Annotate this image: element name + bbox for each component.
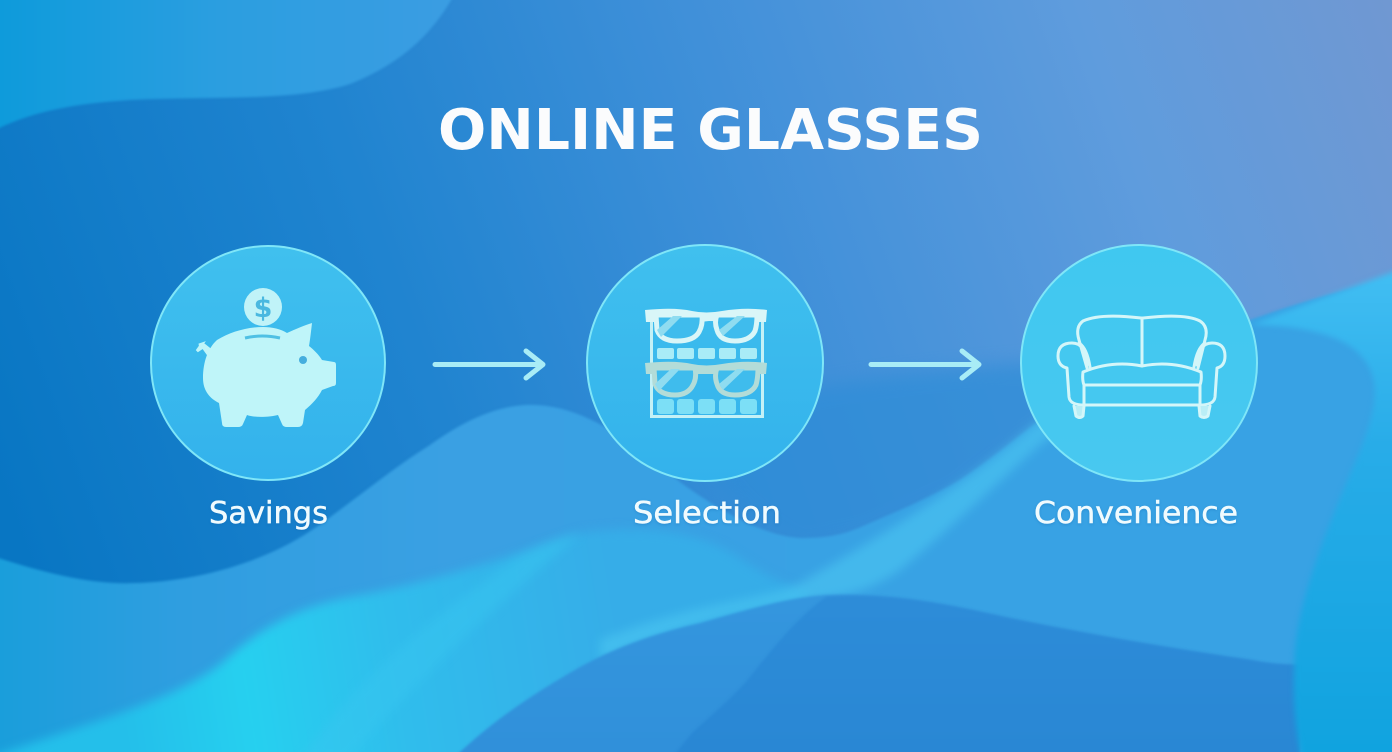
icon: dollar coin: $	[254, 293, 272, 324]
icon: lower glasses	[645, 362, 767, 395]
icon: upper glasses	[645, 309, 767, 341]
icon: dollar coin	[244, 288, 282, 326]
arrow: selection to convenience	[871, 351, 979, 378]
panel: selection	[587, 245, 823, 481]
circle: savings	[151, 246, 385, 480]
light streak: lower left	[300, 533, 580, 752]
panel: savings	[151, 246, 385, 480]
icon: sofa	[1058, 316, 1225, 418]
panel: convenience	[1021, 245, 1257, 481]
label: savings: Savings	[209, 496, 328, 531]
title: ONLINE GLASSES	[438, 98, 983, 163]
circle: convenience	[1021, 245, 1257, 481]
icon: piggy bank	[197, 323, 336, 427]
label: selection: Selection	[633, 496, 781, 531]
label: convenience: Convenience	[1034, 496, 1238, 531]
icon: glasses shelf	[645, 309, 767, 416]
light streak: centre right	[600, 320, 1250, 660]
circle: selection	[587, 245, 823, 481]
arrow: savings to selection	[435, 351, 543, 378]
